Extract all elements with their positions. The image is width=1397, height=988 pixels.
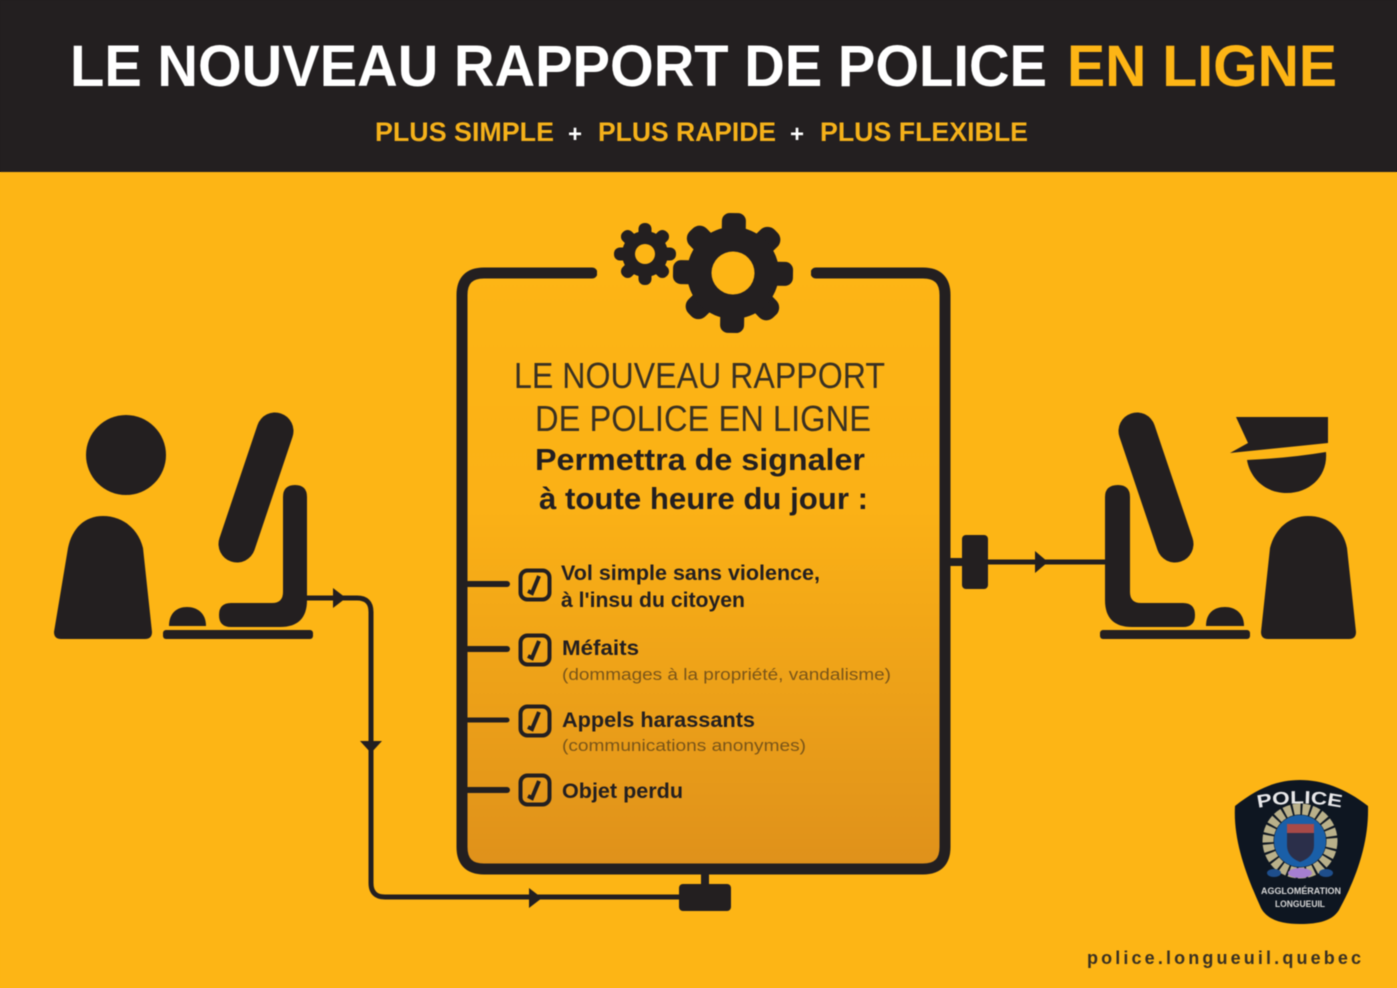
connector: bottom of form bbox=[679, 870, 731, 911]
checklist item: méfaits bbox=[468, 636, 891, 684]
header band bbox=[0, 0, 1397, 172]
checklist item: appels harassants: (communications anonymes) bbox=[562, 736, 806, 755]
arrow: citizen to form bbox=[305, 588, 682, 908]
logo: police badge: AGGLOMÉRATION bbox=[1261, 886, 1341, 896]
checklist item: vol simple bbox=[468, 562, 820, 612]
subtitle: + bbox=[568, 121, 582, 148]
subtitle bbox=[375, 117, 1028, 148]
panel: central form frame bbox=[462, 200, 945, 869]
website url: police.longueuil.quebec bbox=[1087, 948, 1361, 968]
logo: police badge: LONGUEUIL bbox=[1275, 899, 1325, 909]
checklist item: méfaits: (dommages à la propriété, vandalisme) bbox=[562, 665, 891, 684]
checklist item: appels harassants: Appels harassants bbox=[562, 709, 755, 732]
title: LE NOUVEAU RAPPORT DE POLICE bbox=[70, 34, 1047, 99]
checklist item: méfaits: Méfaits bbox=[562, 637, 639, 660]
subtitle: PLUS RAPIDE bbox=[598, 117, 776, 147]
heading: panel intro bbox=[514, 355, 885, 516]
checklist item: vol simple: Vol simple sans violence, bbox=[561, 562, 820, 585]
connector and arrow: form to officer bbox=[950, 535, 1107, 589]
icon: small gear bbox=[614, 223, 676, 285]
heading: panel intro: LE NOUVEAU RAPPORT bbox=[514, 355, 885, 396]
checklist item: objet perdu: Objet perdu bbox=[562, 780, 683, 803]
checklist item: appels harassants bbox=[468, 706, 806, 755]
heading: panel intro: à toute heure du jour : bbox=[539, 481, 868, 516]
subtitle: PLUS FLEXIBLE bbox=[820, 117, 1028, 147]
subtitle: + bbox=[790, 121, 804, 148]
heading: panel intro: Permettra de signaler bbox=[535, 442, 865, 477]
icon: citizen at computer bbox=[54, 415, 313, 639]
logo: police badge bbox=[1234, 779, 1369, 925]
subtitle: PLUS SIMPLE bbox=[375, 117, 554, 147]
logo: police badge: POLICE bbox=[1256, 790, 1343, 808]
checklist item: objet perdu bbox=[468, 776, 683, 804]
checklist item: vol simple: à l'insu du citoyen bbox=[561, 589, 745, 612]
title: EN LIGNE bbox=[1067, 34, 1337, 99]
heading: panel intro: DE POLICE EN LIGNE bbox=[535, 398, 871, 439]
icon: police officer at computer bbox=[1100, 417, 1356, 639]
icon: large gear bbox=[672, 212, 794, 334]
